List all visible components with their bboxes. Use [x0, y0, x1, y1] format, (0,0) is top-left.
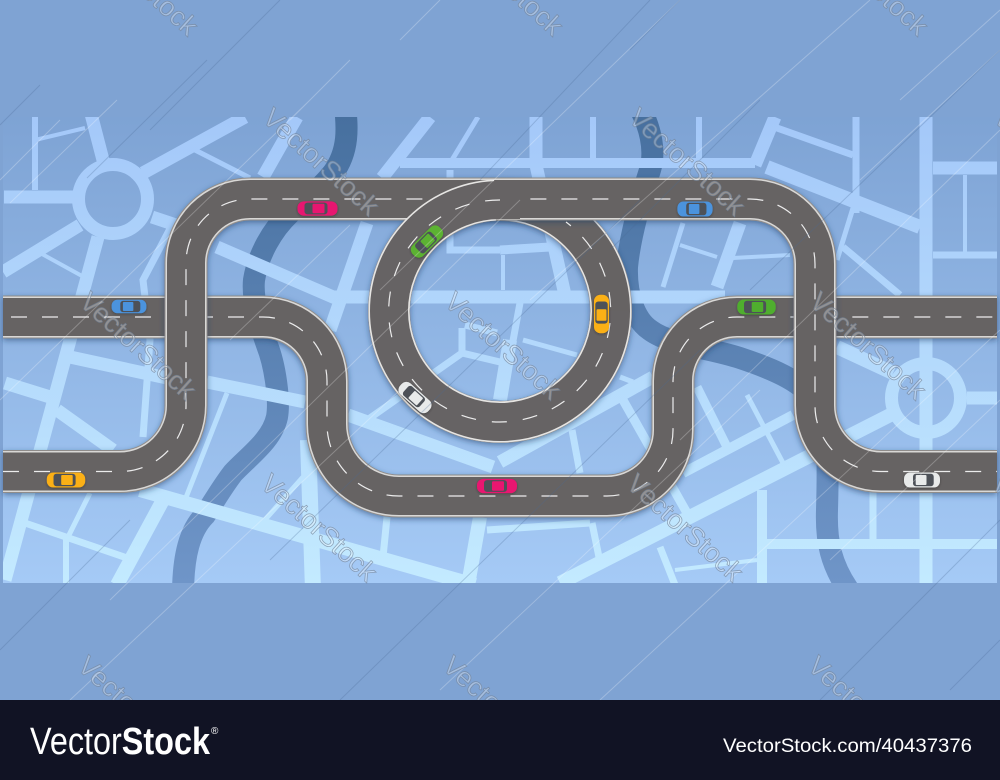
road: lower winding highway	[3, 317, 997, 496]
car: pink top	[298, 201, 338, 216]
road: circular ring	[389, 200, 611, 422]
watermark text: VectorStock	[437, 650, 565, 770]
watermark text: VectorStock	[74, 286, 202, 406]
footer logo: VectorStock	[30, 721, 211, 763]
car: blue left	[112, 300, 146, 313]
watermark text: VectorStock	[621, 468, 749, 588]
city map	[0, 105, 1000, 595]
road: ring left half overlapping upper road	[389, 200, 611, 422]
footer registered mark: ®	[211, 726, 219, 737]
car: yellow ring	[594, 295, 609, 333]
watermark text: VectorStock	[439, 286, 567, 406]
watermark text: VectorStock	[804, 286, 932, 406]
watermark text: VectorStock	[257, 102, 385, 222]
car: blue top right	[677, 202, 713, 216]
footer url: VectorStock.com/40437376	[723, 736, 972, 757]
car: green ring	[408, 223, 446, 260]
footer bar	[0, 700, 1000, 780]
watermark text: VectorStock	[255, 468, 383, 588]
river: left	[183, 105, 347, 595]
road: upper winding highway	[3, 199, 997, 472]
car: pink bottom	[477, 479, 517, 493]
car: yellow left	[47, 472, 85, 488]
car: white right	[904, 472, 940, 488]
cars	[47, 201, 940, 493]
watermark text: VectorStock	[72, 650, 200, 770]
river: right	[627, 105, 852, 595]
watermark text: VectorStock	[623, 102, 751, 222]
street network	[3, 110, 997, 590]
car: green right	[737, 300, 776, 314]
car: white ring	[396, 379, 434, 416]
watermark text: VectorStock	[802, 650, 930, 770]
